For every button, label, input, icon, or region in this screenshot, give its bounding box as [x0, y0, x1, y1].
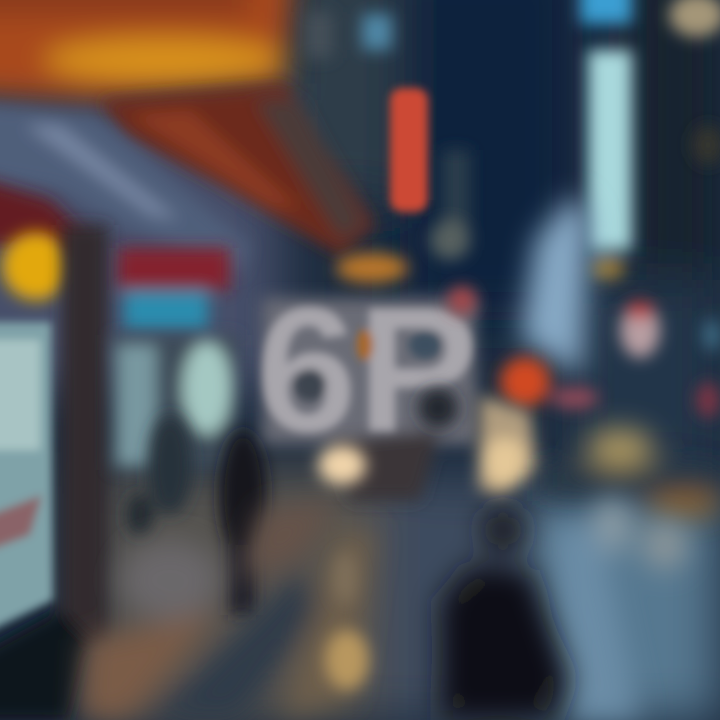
left red band: [0, 170, 85, 255]
dark column: [0, 225, 108, 720]
red neon sign: [390, 88, 428, 212]
shop signs: [118, 248, 230, 330]
bright tower: [580, 0, 720, 280]
yellow sign: [2, 232, 70, 300]
street light glow: [318, 253, 476, 485]
red circular sign: [500, 301, 720, 418]
awning: red underside: [100, 85, 375, 255]
distant signs: [305, 12, 470, 260]
left glowing panel: [0, 322, 54, 650]
traffic lights: [540, 428, 720, 517]
awning: orange canopy: [0, 0, 295, 100]
warm storefront glow: [478, 395, 538, 498]
wet road reflections: [550, 497, 687, 720]
upper left wall: [0, 100, 250, 275]
shop windows: [110, 335, 238, 470]
centre sign backing: [262, 298, 476, 500]
pavement and light streaks: [80, 500, 375, 720]
silhouettes of pedestrians: [126, 415, 267, 615]
pavement reflection: [325, 552, 369, 690]
pale building: [520, 195, 590, 375]
centre sign lettering: 6P: [256, 270, 478, 469]
foreground figure: [440, 506, 570, 720]
